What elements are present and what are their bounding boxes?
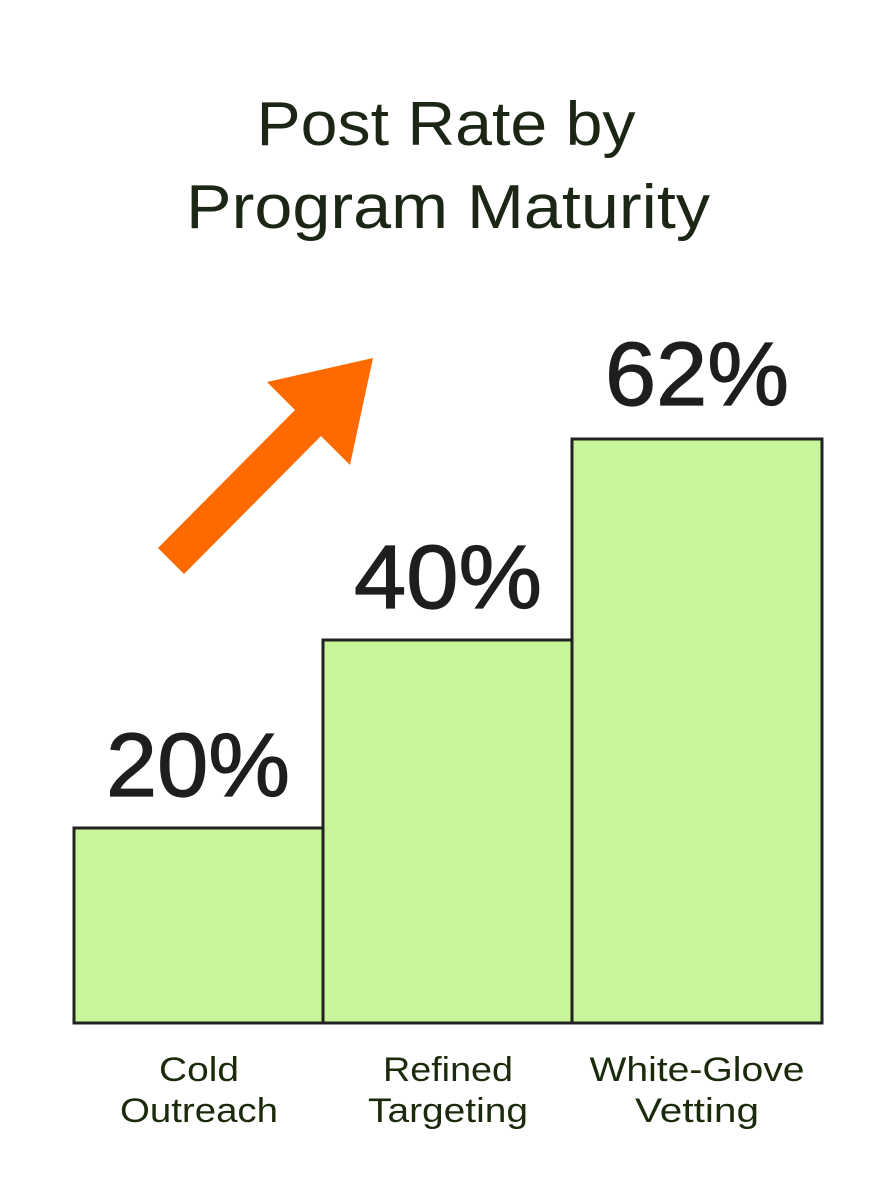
arrow: upward trend bbox=[158, 358, 373, 574]
value labels bbox=[106, 325, 789, 816]
category labels bbox=[120, 1051, 804, 1130]
category labels: Targeting bbox=[368, 1092, 528, 1130]
category labels: Refined bbox=[383, 1051, 513, 1089]
bar: White-Glove Vetting bbox=[572, 439, 822, 1023]
category labels: Cold bbox=[159, 1051, 239, 1089]
bar: Refined Targeting bbox=[323, 640, 572, 1023]
title bbox=[186, 90, 710, 242]
title: Program Maturity bbox=[186, 173, 710, 242]
value labels: 40% bbox=[354, 528, 542, 628]
category labels: Outreach bbox=[120, 1092, 278, 1130]
category labels: White-Glove bbox=[590, 1051, 804, 1089]
bar: Cold Outreach bbox=[74, 828, 323, 1023]
value labels: 62% bbox=[605, 325, 789, 425]
category labels: Vetting bbox=[635, 1092, 759, 1130]
title: Post Rate by bbox=[256, 90, 636, 159]
value labels: 20% bbox=[106, 716, 290, 816]
